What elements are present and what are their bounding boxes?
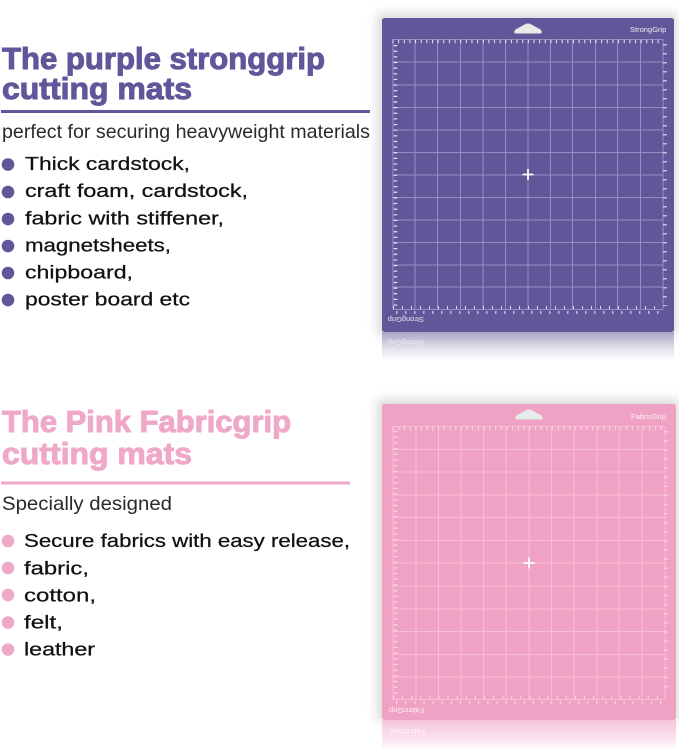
list: purple mat materials: Thick cardstock, <box>25 153 190 174</box>
list: purple mat materials: fabric with stiffener, <box>25 208 224 228</box>
mat centre cross <box>524 558 534 568</box>
heading rule <box>1 482 350 484</box>
heading: purple stronggrip <box>2 42 325 106</box>
soft shadow behind mats <box>377 13 679 721</box>
mat ruler ticks <box>392 428 666 702</box>
panel: pink cutting mat <box>382 404 676 751</box>
mat mirrored label: StrongGrip <box>388 315 424 324</box>
list: pink mat materials <box>2 530 350 660</box>
panel: pink fabricgrip text <box>1 405 350 660</box>
panel: purple stronggrip text <box>1 42 370 310</box>
mat reflection: FabricGrip <box>390 727 425 736</box>
heading: pink fabricgrip <box>2 405 291 471</box>
mat centre cross <box>522 169 534 180</box>
heading: pink fabricgrip: cutting mats <box>2 437 192 471</box>
heading rule <box>1 110 370 113</box>
list: pink mat materials: leather <box>24 638 95 660</box>
mat reflection <box>382 720 676 751</box>
panel: purple cutting mat <box>382 18 674 361</box>
mat reflection: StrongGrip <box>388 338 424 347</box>
mat grid <box>392 426 665 700</box>
list: purple mat materials <box>2 153 248 310</box>
list: purple mat materials: chipboard, <box>25 262 133 282</box>
list: pink mat materials: felt, <box>24 612 63 632</box>
mat grid <box>392 40 663 310</box>
list: pink mat materials: cotton, <box>24 584 96 606</box>
list: purple mat materials: magnetsheets, <box>25 234 171 256</box>
list: purple mat materials: poster board etc <box>25 288 190 310</box>
mat notch <box>514 24 542 34</box>
list: purple mat materials: craft foam, cardstock, <box>25 180 248 201</box>
mat notch <box>515 410 543 420</box>
subtitle: heavyweight materials: perfect for securing heavyweight materials <box>2 121 370 143</box>
subtitle: specially designed: Specially designed <box>2 493 172 515</box>
list: pink mat materials: Secure fabrics with easy release, <box>24 530 350 551</box>
heading: purple stronggrip: The purple stronggrip <box>2 42 325 76</box>
heading: purple stronggrip: cutting mats <box>2 72 192 106</box>
list: pink mat materials: fabric, <box>24 558 89 578</box>
heading: pink fabricgrip: The Pink Fabricgrip <box>2 405 291 439</box>
mat body <box>382 404 676 720</box>
mat body <box>382 18 674 332</box>
mat label: FabricGrip <box>631 412 666 421</box>
mat ruler ticks <box>392 42 665 312</box>
mat reflection <box>382 332 674 361</box>
mat mirrored label: FabricGrip <box>389 706 424 715</box>
mat label: StrongGrip <box>630 25 666 34</box>
